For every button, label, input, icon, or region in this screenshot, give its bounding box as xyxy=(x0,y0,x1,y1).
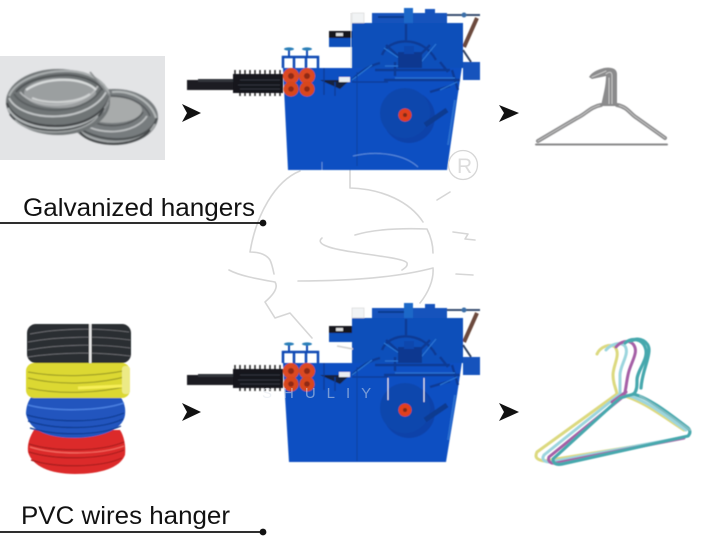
coil: red wire xyxy=(28,430,125,474)
bottom bar xyxy=(536,144,667,146)
image: galvanized hanger xyxy=(536,68,667,144)
machine: bottom hanger machine xyxy=(187,303,480,462)
arrow: bottom input to machine xyxy=(182,403,201,421)
image: PVC wire coils xyxy=(26,324,131,474)
heading: PVC wires hanger: PVC wires hanger xyxy=(21,502,230,530)
heading: PVC wires hanger xyxy=(0,502,266,535)
machine: top hanger machine xyxy=(187,8,480,170)
arrow: top input to machine xyxy=(182,104,201,122)
coil: yellow wire xyxy=(26,363,130,398)
watermark: registered mark: R xyxy=(457,155,472,178)
hook and neck xyxy=(589,68,617,106)
arrow: top machine to product xyxy=(499,105,519,122)
coil: blue wire xyxy=(26,396,125,438)
watermark: lines over machines xyxy=(262,13,478,402)
arrow: bottom machine to product xyxy=(499,403,519,421)
watermark: company logo xyxy=(229,170,475,338)
machine body xyxy=(283,60,463,170)
watermark: brand name: SHULIY xyxy=(262,385,382,402)
machine body xyxy=(283,355,463,462)
heading: galvanized hangers: Galvanized hangers xyxy=(23,194,255,222)
image: galvanized wire coils xyxy=(0,56,165,160)
shoulders xyxy=(538,105,601,141)
coil: black wire xyxy=(27,324,131,363)
watermark: registered mark xyxy=(448,150,478,180)
image: coloured PVC hangers xyxy=(536,339,690,464)
